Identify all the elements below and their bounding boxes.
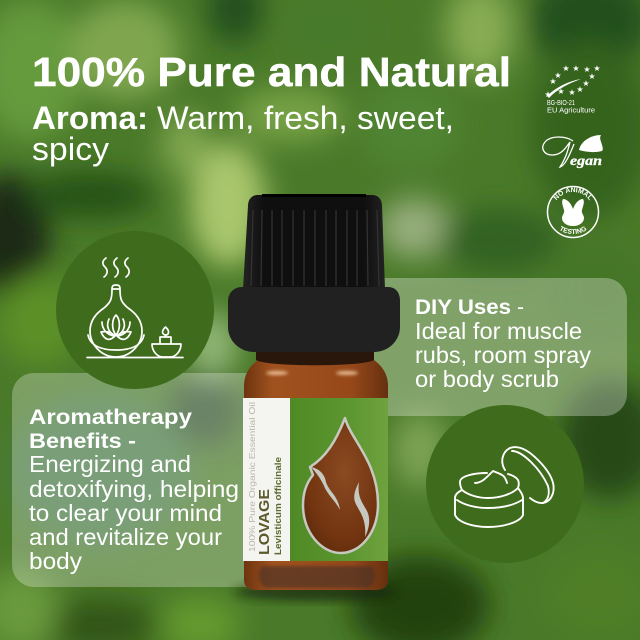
aroma description: Warm, fresh, sweet, — [157, 100, 454, 136]
badge: EU organic: ★ — [572, 64, 580, 73]
aromatherapy benefits text — [29, 406, 239, 574]
badge: EU organic: EU Agriculture — [547, 106, 595, 114]
amber glass body — [244, 360, 388, 590]
icon circle: cream jar — [426, 405, 584, 563]
white label strip: 100% Pure Organic Essential Oil — [247, 402, 257, 552]
badge: EU organic: ★ — [562, 64, 570, 73]
title: 100% Pure and Natural — [32, 49, 511, 95]
badge: EU organic: ★ — [593, 64, 601, 73]
bottle shadow — [234, 583, 398, 601]
DIY uses text: rubs, room spray — [415, 342, 592, 368]
aromatherapy benefits text: body — [29, 548, 83, 574]
badge: EU organic: ★ — [582, 79, 590, 88]
badge: vegan — [543, 135, 603, 169]
badge: EU organic: BG-BIO-21 — [547, 98, 575, 107]
aromatherapy benefits text: and revitalize your — [29, 524, 222, 550]
badge: EU organic: ★ — [576, 85, 584, 94]
badge: EU organic: ★ — [568, 88, 576, 97]
ribbed black cap — [243, 194, 385, 289]
aroma description: spicy — [32, 131, 110, 167]
aromatherapy benefits text: detoxifying, helping — [29, 476, 239, 502]
badge: EU organic: ★ — [544, 90, 552, 99]
badge: EU organic: ★ — [588, 72, 596, 81]
aromatherapy benefits text: Aromatherapy — [29, 406, 192, 429]
neck — [256, 350, 374, 365]
product bottle — [228, 194, 400, 601]
icon circle: diffuser and candle — [56, 231, 214, 389]
badge: vegan: egan — [570, 154, 602, 169]
oil drop logo — [303, 418, 378, 553]
DIY uses text: DIY Uses — [415, 296, 511, 319]
badge: EU organic: ★ — [557, 87, 565, 96]
aroma description: Aroma: — [32, 100, 148, 136]
aromatherapy benefits text: to clear your mind — [29, 500, 222, 526]
green label — [290, 398, 388, 561]
DIY uses text: - — [517, 296, 524, 319]
white label strip: LOVAGE — [257, 489, 273, 555]
aromatherapy benefits text: Energizing and — [29, 451, 191, 477]
badge: EU organic: ★ — [549, 77, 557, 86]
DIY uses text: Ideal for muscle — [415, 318, 582, 344]
badge: no animal testing: TESTING — [560, 226, 586, 234]
badge: EU organic — [544, 64, 601, 114]
badge: no animal testing: NO ANIMAL — [553, 187, 592, 200]
panel: DIY uses — [330, 278, 627, 416]
aroma description — [32, 100, 454, 167]
badge: EU organic: ★ — [554, 71, 562, 80]
DIY uses text — [415, 296, 592, 392]
white label strip — [243, 398, 290, 561]
panel: aromatherapy benefits — [12, 373, 282, 587]
DIY uses text: or body scrub — [415, 366, 559, 392]
badge: EU organic: ★ — [583, 65, 591, 74]
dropper collar — [228, 287, 400, 352]
white label strip: Levisticum officinale — [273, 457, 284, 555]
badge: no animal testing — [546, 186, 600, 238]
aromatherapy benefits text: Benefits - — [29, 430, 136, 453]
